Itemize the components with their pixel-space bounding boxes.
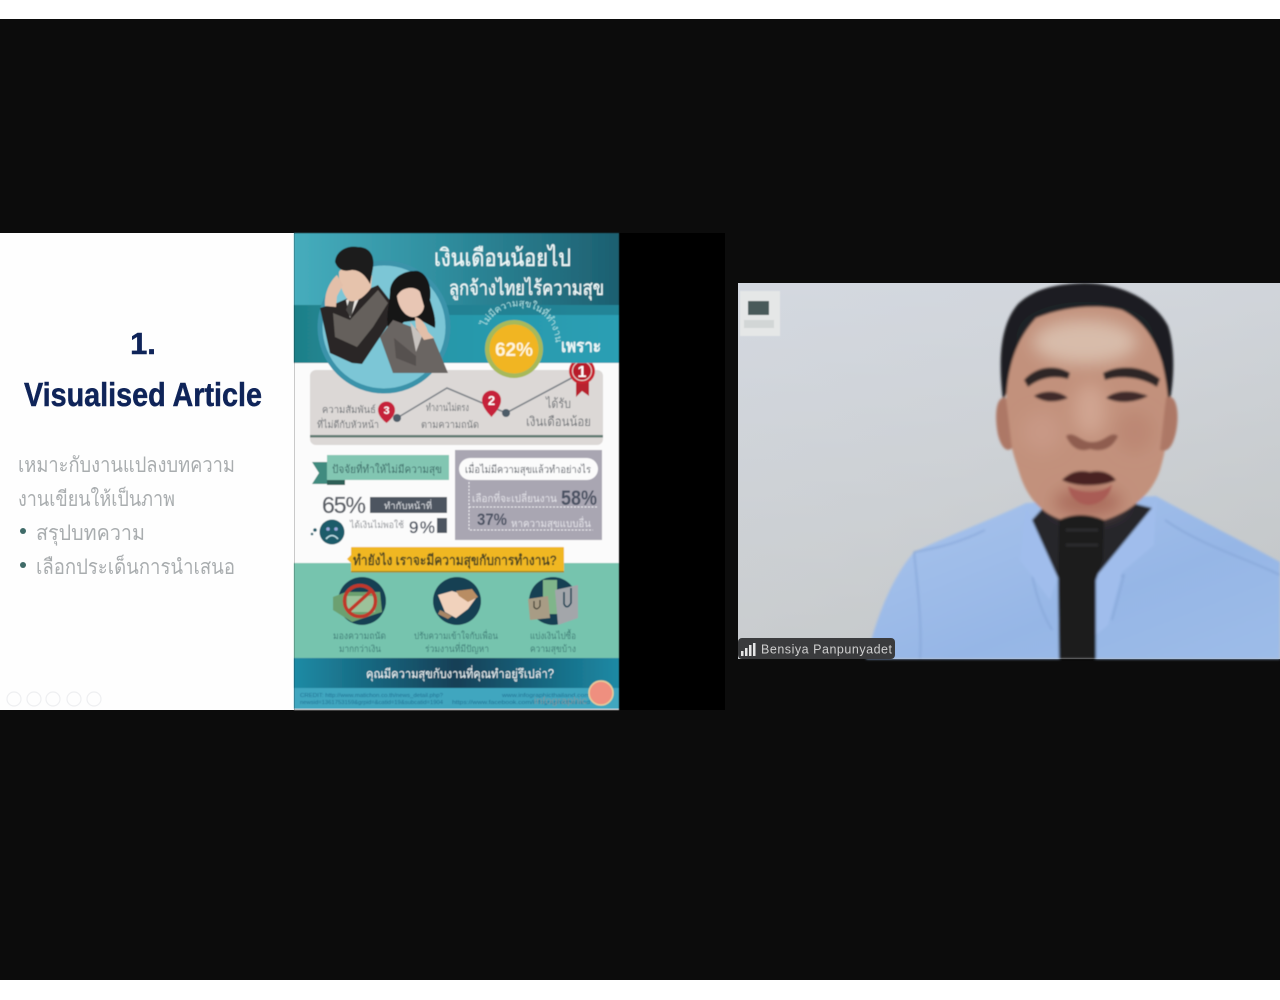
- shirt: [866, 496, 1280, 659]
- closing question bar: [294, 658, 619, 688]
- stat: 58 percent: เลือกที่จะเปลี่ยนงาน: [472, 491, 557, 505]
- logo badge: [589, 681, 613, 705]
- panel: slide text area: [0, 233, 294, 710]
- yellow question banner: [347, 547, 564, 572]
- ribbon heading: ปัจจัยที่ทำให้ไม่มีความสุข: [332, 461, 442, 476]
- captions: ความสุขบ้าง: [530, 644, 576, 655]
- stat: 58 percent: [472, 487, 597, 510]
- credits strip: https://www.facebook.com/infographicthailand: [452, 700, 590, 706]
- stat: 65 percent: ทำกับหน้าที่: [384, 499, 432, 512]
- stat: 37 percent: หาความสุขแบบอื่น: [511, 516, 591, 530]
- credits strip: infographic: [534, 696, 587, 707]
- name tag: [738, 638, 895, 659]
- icon: handshake: [433, 577, 481, 625]
- microphone: [1058, 515, 1104, 659]
- stat: 9 percent: 9%: [409, 518, 435, 537]
- pin 2: [482, 390, 501, 417]
- collar: [1020, 500, 1156, 640]
- stat: 37 percent: [477, 510, 591, 530]
- reason labels: เงินเดือนน้อย: [526, 414, 591, 429]
- slide body text: สรุปบทความ: [36, 522, 145, 546]
- subtitle: ลูกจ้างไทยไร้ความสุข: [449, 277, 604, 301]
- illustration: man: [320, 247, 392, 364]
- yellow question banner: ทำยังไง เราจะมีความสุขกับการทำงาน?: [353, 551, 557, 569]
- illustration: woman: [380, 271, 448, 373]
- panel: top three reasons chart: [310, 358, 603, 445]
- captions: ปรับความเข้าใจกับเพื่อน: [414, 629, 498, 642]
- panel: what people do when unhappy: [455, 450, 602, 540]
- trend line: [397, 373, 581, 418]
- slide body text: เหมาะกับงานแปลงบทความ: [18, 454, 235, 477]
- panel: shared slide: [0, 232, 725, 711]
- panel: unhappiness factors: [311, 455, 449, 544]
- slide show controls: [7, 692, 101, 706]
- captions: มากกว่าเงิน: [339, 644, 381, 655]
- panel: infographic: [293, 232, 620, 711]
- icon: sad face: [311, 520, 344, 544]
- reason labels: ที่ไม่ดีกับหัวหน้า: [317, 417, 379, 431]
- mouth: [1062, 471, 1116, 505]
- signal bars: [741, 643, 756, 656]
- name tag: Bensiya Panpunyadet: [761, 642, 893, 656]
- icon: no money: [333, 577, 386, 625]
- stat: 9 percent: ได้เงินไม่พอใช้: [349, 519, 405, 531]
- shirt seams: [914, 520, 1280, 659]
- pin 3: [378, 402, 395, 423]
- slide heading: Visualised Article: [24, 376, 262, 413]
- credits strip: CREDIT: http://www.matichon.co.th/news_detail.php?: [300, 693, 443, 699]
- stat: 65 percent: [322, 492, 447, 518]
- captions: [333, 629, 576, 655]
- ears: [996, 397, 1178, 451]
- panel: how to be happy: [294, 547, 619, 658]
- slide body text: [18, 454, 235, 579]
- medal 1: [569, 358, 595, 397]
- reason labels: ทำงานไม่ตรง: [426, 402, 469, 414]
- credits strip: [294, 681, 619, 709]
- credits strip: www.infographicthailand.com: [501, 693, 591, 699]
- face: [1006, 307, 1168, 524]
- captions: แบ่งเงินไปซื้อ: [530, 629, 576, 642]
- portrait circle: [320, 263, 448, 391]
- reason labels: [317, 396, 591, 431]
- speaker: [866, 283, 1280, 659]
- pin 2: 2: [488, 393, 495, 408]
- badge: 62 percent: 62%: [495, 340, 533, 361]
- title: เงินเดือนน้อยไป: [434, 244, 571, 272]
- nose: [1066, 434, 1118, 450]
- facial shading: [1022, 320, 1153, 516]
- captions: มองความถนัด: [333, 631, 386, 642]
- medal 1: 1: [578, 364, 587, 381]
- stat: 37 percent: 37%: [477, 510, 507, 529]
- arc caption: ไม่มีความสุขในที่ทำงาน: [478, 300, 562, 343]
- reason labels: ตามความถนัด: [421, 420, 479, 431]
- infographic header: [293, 232, 620, 394]
- reason labels: ได้รับ: [545, 396, 571, 411]
- eyes: [1034, 391, 1148, 402]
- reason labels: ความสัมพันธ์: [322, 404, 376, 416]
- because label: เพราะ: [561, 336, 601, 356]
- slide body text: เลือกประเด็นการนำเสนอ: [36, 553, 235, 579]
- captions: ร่วมงานที่มีปัญหา: [425, 642, 489, 655]
- panel: speaker video: [738, 283, 1280, 659]
- neck shadow: [1032, 500, 1152, 578]
- eyebrows: [1024, 367, 1160, 387]
- stat: 58 percent: 58%: [561, 487, 597, 510]
- stat: 65 percent: 65%: [322, 492, 366, 518]
- stat: 9 percent: [349, 518, 447, 537]
- badge: 62 percent: [485, 320, 543, 378]
- data points: [393, 409, 510, 422]
- wall thermostat: [740, 291, 780, 336]
- hair: [1001, 283, 1173, 410]
- pin 3: 3: [383, 405, 390, 417]
- closing question bar: คุณมีความสุขกับงานที่คุณทำอยู่รึเปล่า?: [366, 665, 554, 682]
- slide number heading: 1.: [130, 326, 156, 361]
- credits strip: newsid=1361753159&grpid=&catid=19&subcatid=1904: [300, 700, 443, 706]
- pill heading: เมื่อไม่มีความสุขแล้วทำอย่างไร: [465, 462, 591, 476]
- slide body text: งานเขียนให้เป็นภาพ: [18, 485, 175, 511]
- icon: shopping bags: [528, 577, 578, 625]
